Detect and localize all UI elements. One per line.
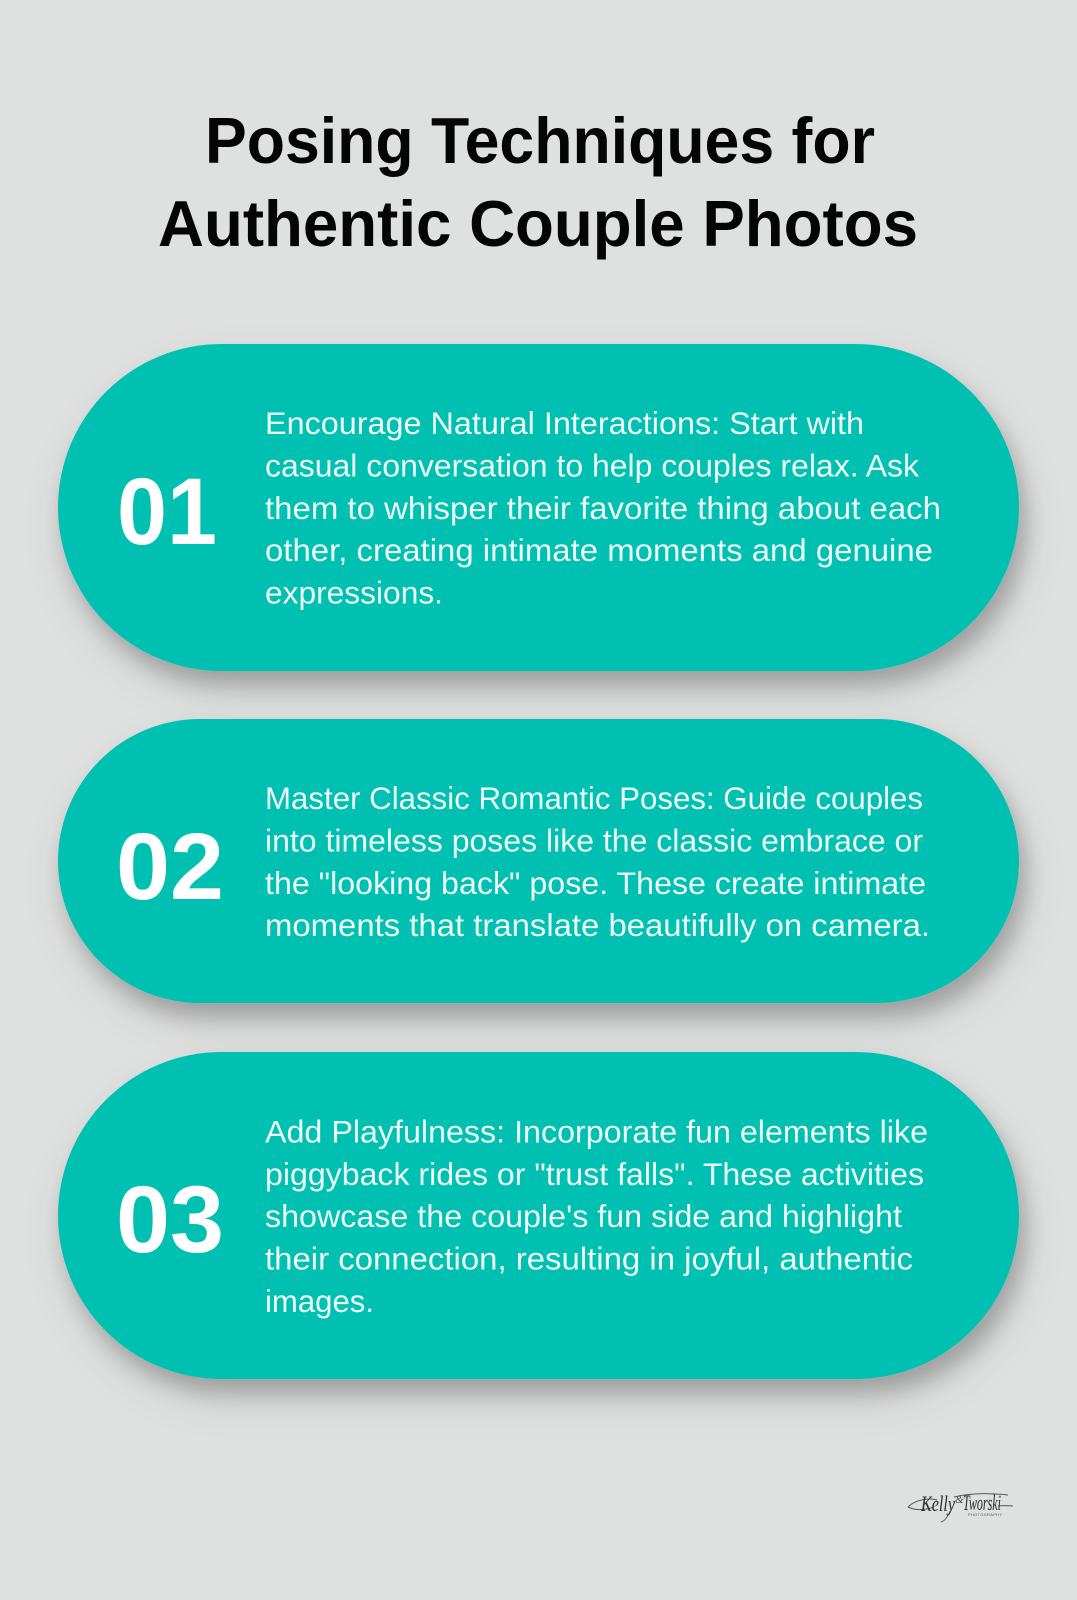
logo: signature: & bbox=[955, 1494, 964, 1506]
text block 03: showcase the couple's fun side and highlight bbox=[265, 1198, 902, 1234]
panel: step 03 bbox=[58, 1052, 1019, 1379]
text block 01: expressions. bbox=[265, 574, 443, 610]
number 01: 01 bbox=[117, 459, 217, 565]
text block 03 bbox=[265, 1114, 928, 1319]
panel: step 02 bbox=[58, 719, 1019, 1003]
text block 03: Add Playfulness: Incorporate fun elements like bbox=[265, 1114, 928, 1150]
pill background 01 bbox=[58, 344, 1019, 671]
logo: signature: Tworski bbox=[963, 1490, 1001, 1515]
text block 02 bbox=[265, 780, 930, 943]
text block 03: their connection, resulting in joyful, authentic bbox=[265, 1240, 913, 1276]
text block 01: other, creating intimate moments and genuine bbox=[265, 532, 933, 568]
panel: step 01 bbox=[58, 344, 1019, 671]
text block 02: into timeless poses like the classic embrace or bbox=[265, 822, 923, 858]
number 03: 03 bbox=[116, 1167, 224, 1273]
logo: signature: Kelly bbox=[920, 1491, 955, 1516]
text block 02: moments that translate beautifully on camera. bbox=[265, 907, 930, 943]
pill background 02 bbox=[58, 719, 1019, 1003]
title bbox=[158, 104, 918, 260]
text block 01 bbox=[265, 405, 941, 610]
text block 03: images. bbox=[265, 1283, 374, 1319]
text block 03: piggyback rides or "trust falls". These activities bbox=[265, 1156, 924, 1192]
title: Posing Techniques for bbox=[205, 104, 875, 177]
number 02: 02 bbox=[116, 814, 224, 920]
text block 02: Master Classic Romantic Poses: Guide couples bbox=[265, 780, 923, 816]
title: Authentic Couple Photos bbox=[158, 187, 918, 260]
text block 01: casual conversation to help couples relax. Ask bbox=[265, 448, 919, 484]
text block 01: them to whisper their favorite thing about each bbox=[265, 490, 941, 526]
text block 02: the "looking back" pose. These create intimate bbox=[265, 865, 926, 901]
logo: signature: PHOTOGRAPHY bbox=[968, 1512, 1002, 1517]
logo: signature bbox=[908, 1490, 1013, 1522]
pill background 03 bbox=[58, 1052, 1019, 1379]
text block 01: Encourage Natural Interactions: Start with bbox=[265, 405, 864, 441]
